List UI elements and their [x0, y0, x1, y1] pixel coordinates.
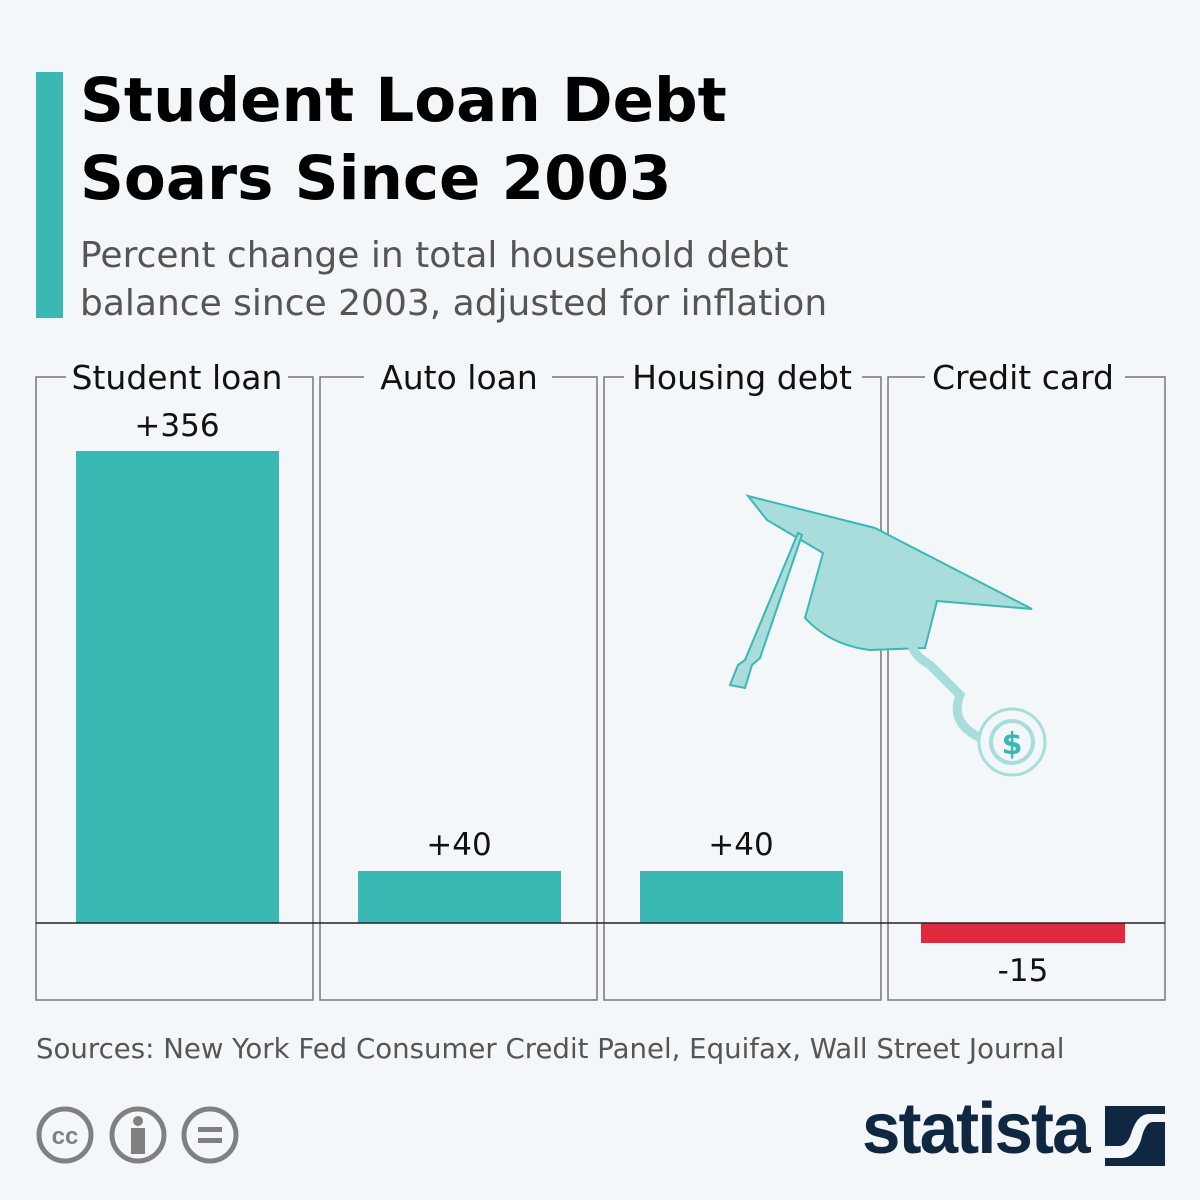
panel: auto loan: [320, 358, 597, 1000]
subtitle: [80, 235, 827, 324]
bar: student loan: [76, 451, 279, 923]
title: [80, 65, 727, 214]
panel: housing debt: [604, 358, 881, 1000]
value: -15: -15: [998, 953, 1048, 989]
accent bar: [36, 72, 63, 318]
bar: credit card: [921, 923, 1125, 943]
subtitle: balance since 2003, adjusted for inflation: [80, 283, 827, 324]
panel: student loan: [36, 358, 313, 1000]
value: +40 housing: +40: [708, 827, 774, 863]
icons: creative commons: cc: [52, 1123, 78, 1150]
bar: housing: [640, 871, 843, 923]
panel: credit card: Credit card: [932, 358, 1114, 397]
bar: auto loan: [358, 871, 561, 923]
panel: auto loan: Auto loan: [380, 358, 538, 397]
icons: creative commons: [36, 1106, 238, 1164]
subtitle: Percent change in total household debt: [80, 235, 789, 276]
panel: housing debt: Housing debt: [632, 358, 852, 397]
title: Soars Since 2003: [80, 143, 671, 214]
panel: student loan: Student loan: [72, 358, 282, 397]
value: +356: +356: [134, 408, 220, 444]
icon: graduation cap with chain and coin: $: [1002, 727, 1022, 762]
title: Student Loan Debt: [80, 65, 727, 136]
logo: statista: statista: [862, 1089, 1089, 1169]
icon: graduation cap with chain and coin: [730, 496, 1045, 775]
panel: credit card: [888, 358, 1165, 1000]
value: +40 auto: +40: [426, 827, 492, 863]
source text: Sources: New York Fed Consumer Credit Panel, Equifax, Wall Street Journal: [36, 1032, 1064, 1065]
